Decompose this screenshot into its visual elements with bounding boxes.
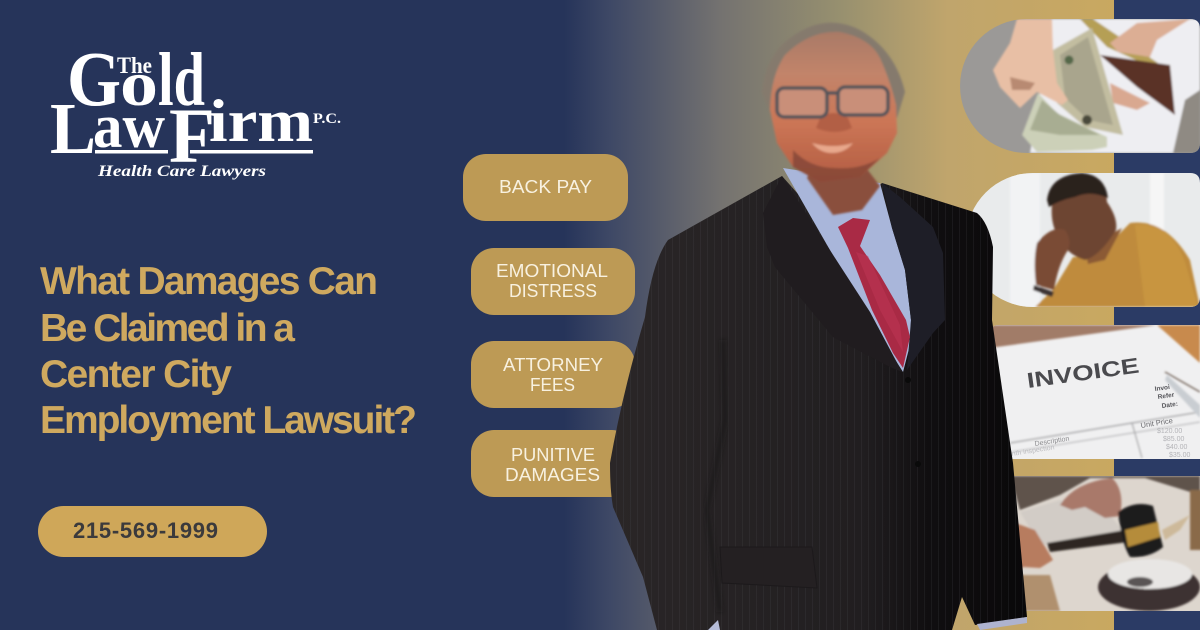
logo: The Gold Law Firm: aw [93, 93, 165, 161]
pill: back pay: BACK PAY [499, 177, 592, 197]
sleeve shadow [707, 340, 725, 612]
head [762, 23, 905, 215]
pill: attorney fees: ATTORNEY [503, 355, 603, 375]
photo: invoice document: Invoi [1154, 384, 1170, 393]
photo: invoice document: Description [1034, 436, 1070, 448]
photo: invoice document: $85.00 [1163, 436, 1185, 443]
photo: invoice document: Date: [1161, 401, 1178, 410]
invoice word: INVOICE [1025, 353, 1141, 393]
lapels [763, 176, 902, 372]
logo: The Gold Law Firm [50, 35, 341, 180]
photo: stressed man in mustard sweater [960, 173, 1200, 307]
title: Center City [40, 353, 232, 396]
pocket flap [720, 547, 817, 588]
title: Employment Lawsuit? [40, 399, 417, 442]
buttons [905, 377, 911, 383]
pill: emotional distress: EMOTIONAL [496, 261, 608, 281]
logo: The Gold Law Firm: L [50, 88, 96, 169]
pill: emotional distress [471, 248, 635, 315]
logo: The Gold Law Firm: The [117, 53, 152, 78]
photo: invoice document: $40.00 [1166, 444, 1188, 451]
logo: The Gold Law Firm: F [169, 92, 215, 179]
logo: The Gold Law Firm: G [67, 35, 121, 122]
photo: invoice document: $35.00 [1169, 452, 1191, 459]
phone button: 215-569-1999 [73, 518, 218, 543]
logo: The Gold Law Firm: P.C. [313, 111, 341, 127]
pill: punitive damages: PUNITIVE [511, 445, 595, 465]
pill: attorney fees [471, 341, 635, 408]
logo: The Gold Law Firm: irm [209, 88, 313, 154]
pill: punitive damages: DAMAGES [505, 465, 600, 485]
photo: hands with cash and wallet [955, 19, 1200, 153]
glasses [777, 87, 888, 117]
photo: judge gavel [1000, 476, 1200, 611]
photo: invoice document: nth inspection [1011, 444, 1055, 458]
title: Be Claimed in a [40, 307, 295, 350]
pill: attorney fees: FEES [530, 375, 575, 395]
right navy strip [1114, 0, 1200, 630]
pill: back pay [463, 154, 628, 221]
logo: The Gold Law Firm: o [120, 48, 158, 119]
title [40, 260, 417, 442]
pill: emotional distress: DISTRESS [509, 281, 597, 301]
photo: invoice document: $120.00 [1157, 428, 1182, 435]
logo: The Gold Law Firm: ld [158, 38, 205, 122]
shirt [783, 168, 911, 372]
tie [838, 218, 910, 368]
attorney portrait [610, 23, 1027, 630]
title: What Damages Can [40, 260, 378, 303]
photo: invoice document [985, 325, 1200, 459]
pill: punitive damages [471, 430, 635, 497]
photo: invoice document: Refer [1157, 392, 1175, 401]
shirt cuffs [977, 617, 1027, 630]
logo: The Gold Law Firm: Health Care Lawyers [97, 163, 266, 180]
suit jacket [610, 176, 1027, 630]
phone button [38, 506, 267, 557]
photo: invoice document: Unit Price [1140, 416, 1173, 430]
